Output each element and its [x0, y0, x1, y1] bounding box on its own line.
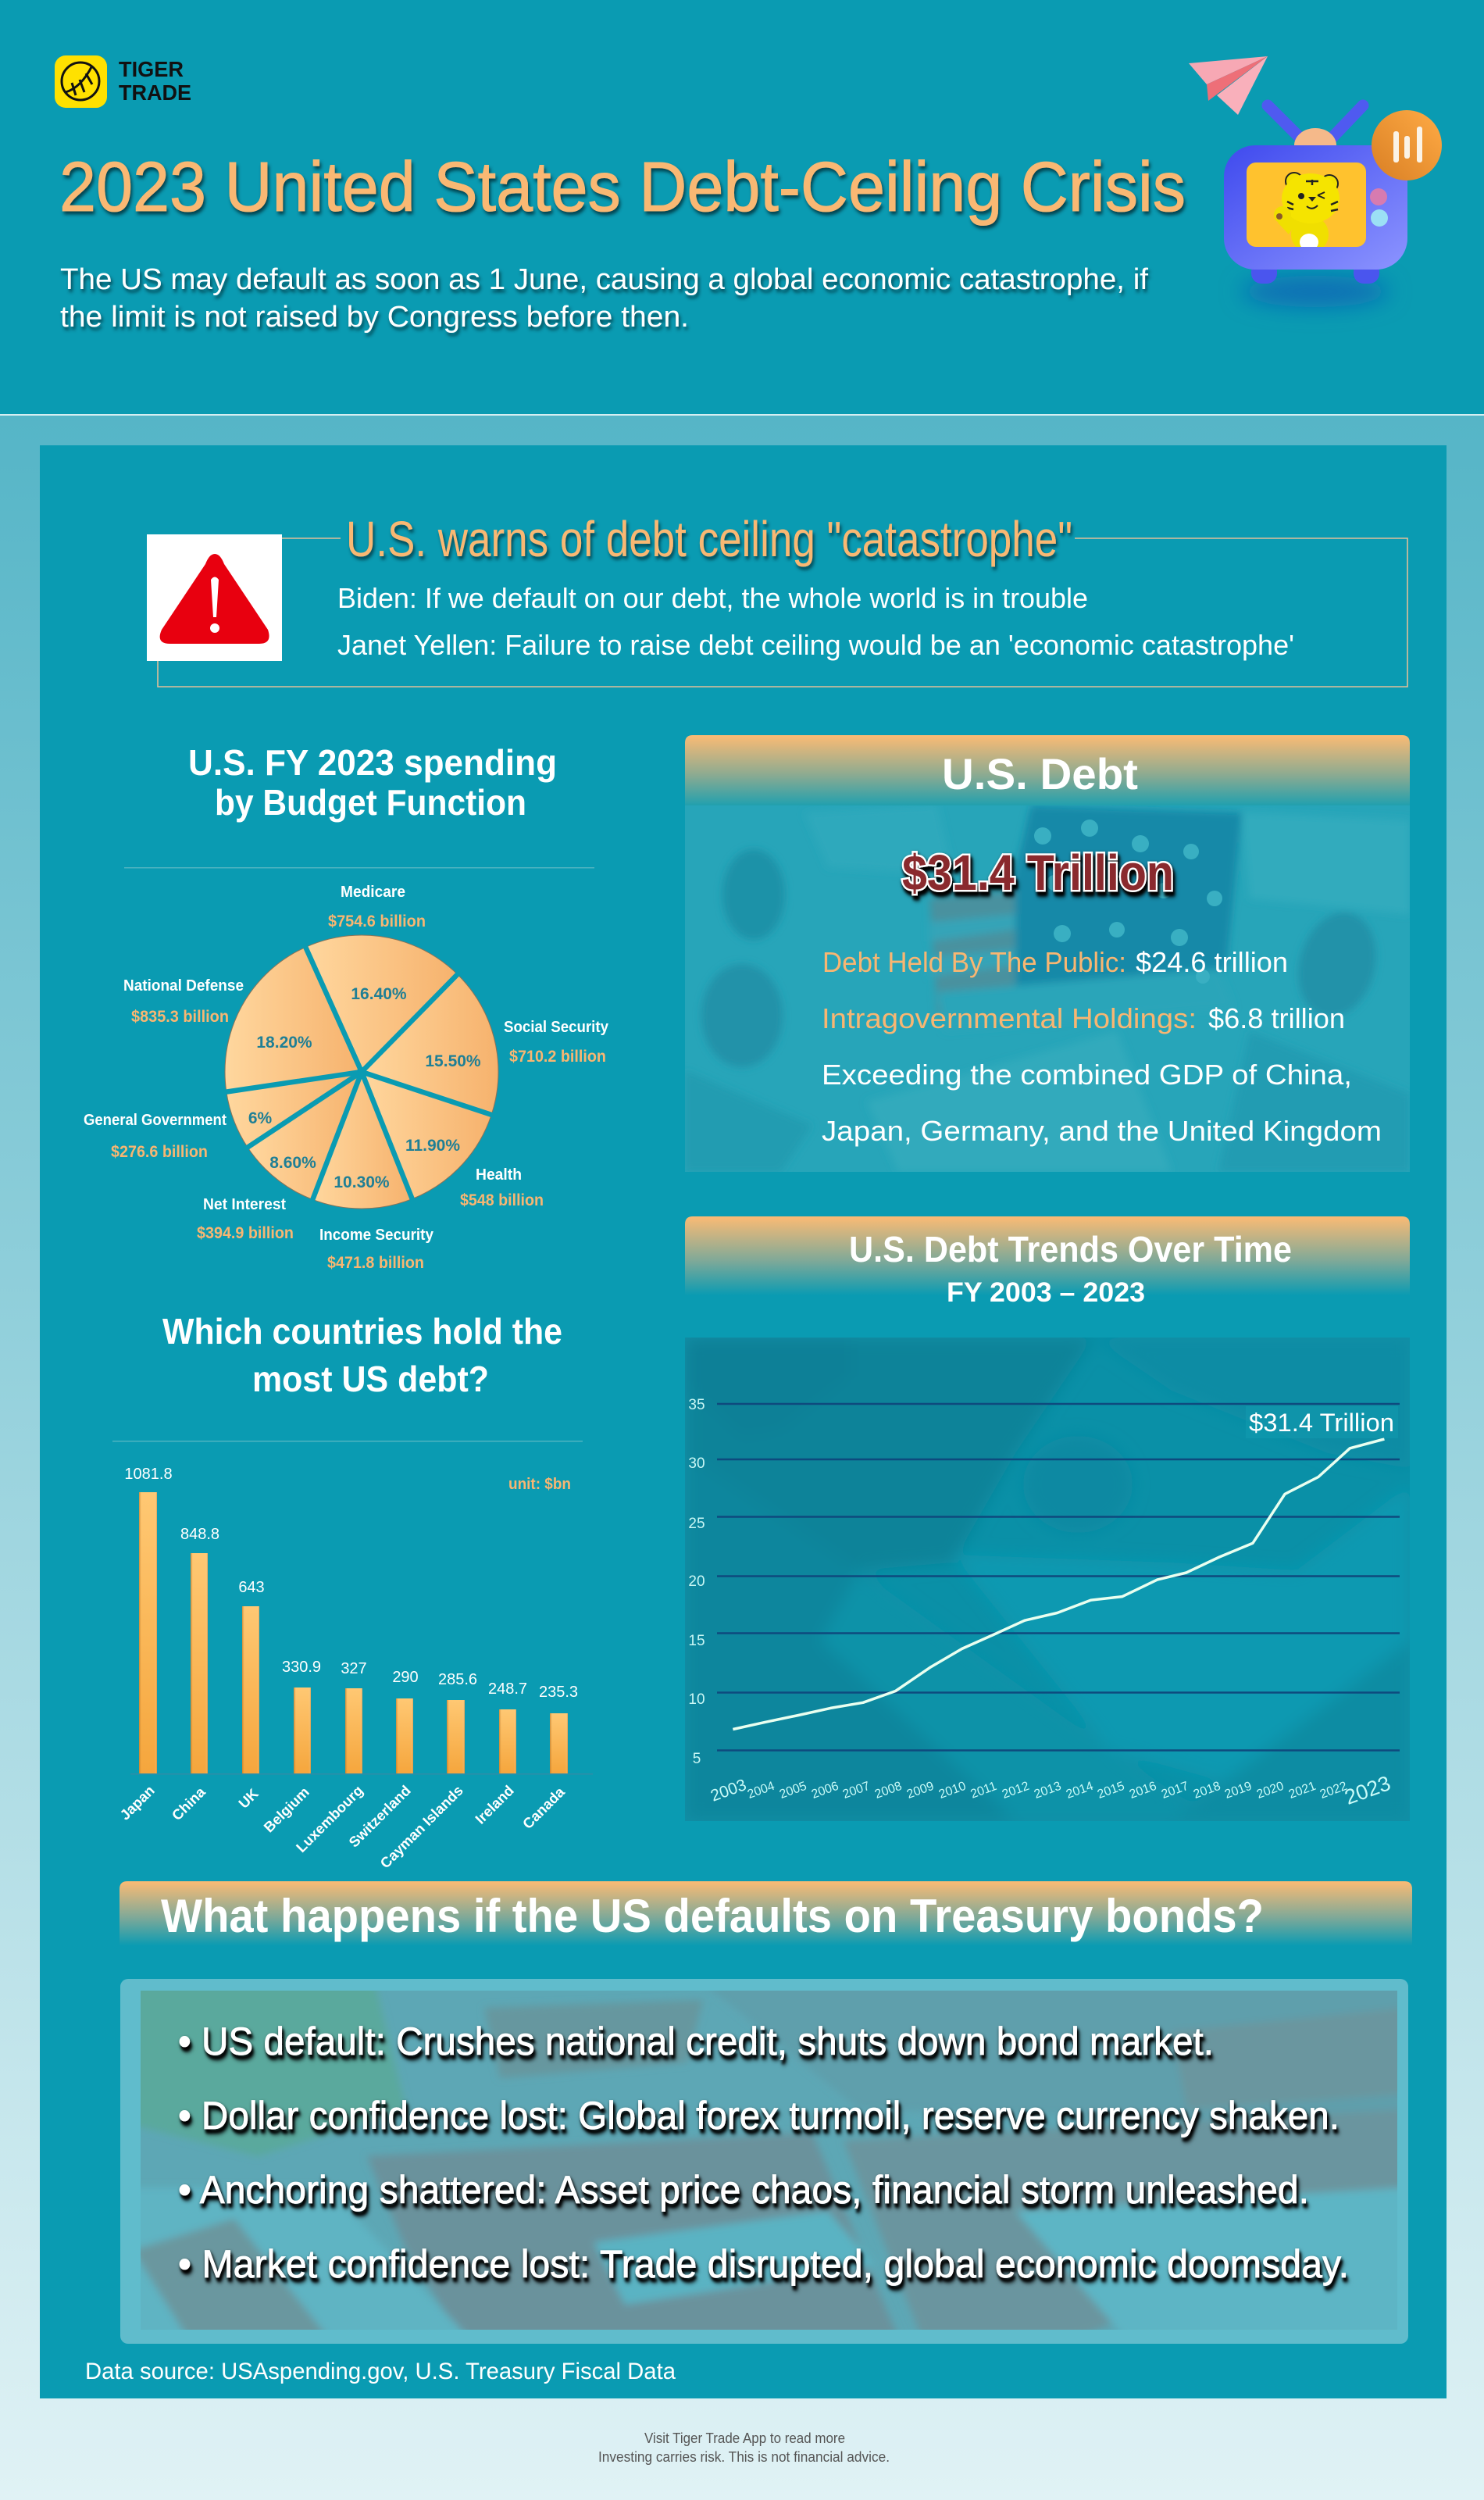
debt heading: U.S. Debt — [942, 749, 1138, 798]
callout quotes: Janet Yellen: Failure to raise debt ceiling would be an 'economic catastrophe' — [337, 629, 1294, 661]
trend heading: U.S. Debt Trends Over Time — [849, 1229, 1292, 1270]
line chart: 2014 — [1065, 1780, 1095, 1802]
pie labels: $548 billion — [460, 1191, 544, 1209]
bar chart: 1081.8 — [124, 1466, 173, 1483]
callout heading: U.S. warns of debt ceiling "catastrophe" — [346, 511, 1072, 567]
main panel — [40, 445, 1447, 2398]
footer — [598, 2430, 890, 2465]
trend heading — [849, 1229, 1292, 1308]
debt details: Japan, Germany, and the United Kingdom — [822, 1115, 1382, 1147]
line chart: $31.4 Trillion — [1249, 1409, 1394, 1437]
trend heading: FY 2003 – 2023 — [947, 1277, 1145, 1308]
pie chart: 8.60% — [269, 1154, 316, 1172]
line chart: 35 — [688, 1397, 705, 1413]
line chart: 2007 — [841, 1780, 872, 1802]
bar chart: Luxembourg — [293, 1782, 366, 1855]
line chart: 2015 — [1096, 1780, 1126, 1802]
pie labels: $276.6 billion — [111, 1143, 208, 1161]
line chart: 25 — [688, 1516, 705, 1532]
logo: Tiger Trade — [55, 55, 191, 108]
consequences heading: What happens if the US defaults on Treasury bonds? — [161, 1890, 1264, 1942]
consequences bullets — [178, 2020, 1349, 2286]
pie heading — [188, 742, 557, 823]
subtitle — [60, 263, 1148, 334]
line chart: 2010 — [937, 1780, 968, 1802]
panel: warning callout — [147, 511, 1407, 687]
line chart: 30 — [688, 1455, 705, 1472]
line chart — [688, 1397, 1400, 1809]
pie labels: Social Security — [504, 1019, 609, 1036]
debt background image — [685, 805, 1410, 1172]
debt details: Exceeding the combined GDP of China, — [822, 1059, 1352, 1091]
callout quotes: Biden: If we default on our debt, the whole world is in trouble — [337, 582, 1088, 614]
debt details: Intragovernmental Holdings: — [822, 1002, 1197, 1034]
line chart: 2009 — [905, 1780, 936, 1802]
bar chart: 235.3 — [539, 1684, 578, 1701]
consequences bullets: • Dollar confidence lost: Global forex turmoil, reserve currency shaken. — [178, 2094, 1340, 2138]
pie labels: $835.3 billion — [131, 1008, 229, 1026]
panel: debt trend — [685, 1216, 1410, 1821]
line chart: 2003 — [708, 1776, 749, 1805]
trend background image — [685, 1338, 1410, 1821]
bar chart: 327 — [341, 1660, 367, 1677]
title: 2023 United States Debt-Ceiling Crisis — [59, 148, 1186, 227]
consequences bullets: • Anchoring shattered: Asset price chaos, financial storm unleashed. — [178, 2168, 1309, 2212]
bar chart heading: most US debt? — [252, 1359, 489, 1399]
bar chart: Japan — [116, 1782, 158, 1823]
line chart: 2018 — [1192, 1780, 1222, 1802]
logo wordmark: TIGER — [119, 57, 184, 81]
subtitle: The US may default as soon as 1 June, causing a global economic catastrophe, if — [60, 263, 1148, 296]
icon: warning triangle — [147, 534, 282, 661]
bar chart: 285.6 — [438, 1671, 477, 1688]
icon: tiger television — [1224, 105, 1442, 307]
pie chart — [221, 935, 498, 1209]
bar chart: UK — [235, 1785, 262, 1812]
line chart: 2019 — [1223, 1780, 1254, 1802]
pie labels — [84, 884, 609, 1272]
pie chart: 15.50% — [425, 1052, 481, 1070]
line chart: 20 — [688, 1573, 705, 1590]
bar chart: Ireland — [472, 1782, 517, 1827]
debt details: $6.8 trillion — [1208, 1002, 1345, 1034]
line chart: 2008 — [873, 1780, 904, 1802]
icon: paper plane — [1189, 56, 1268, 115]
bar chart: 330.9 — [282, 1659, 321, 1676]
pie chart: 10.30% — [334, 1173, 390, 1191]
panel: spending pie — [84, 742, 609, 1272]
pie labels: General Government — [84, 1112, 227, 1129]
line chart: 2013 — [1033, 1780, 1063, 1802]
line chart: 2022 — [1318, 1780, 1349, 1802]
consequences header — [120, 1881, 1412, 1962]
consequences bullets: • Market confidence lost: Trade disrupted, global economic doomsday. — [178, 2242, 1349, 2286]
pie labels: National Defense — [123, 977, 244, 995]
callout quotes — [337, 582, 1294, 661]
debt details: Debt Held By The Public: — [822, 946, 1126, 978]
bar chart heading: Which countries hold the — [162, 1311, 562, 1352]
bar chart: Canada — [519, 1783, 568, 1832]
consequences bullets: • US default: Crushes national credit, shuts down bond market. — [178, 2020, 1214, 2063]
panel: holders bar chart — [112, 1311, 593, 1871]
logo wordmark: TRADE — [119, 80, 191, 105]
bar chart: Switzerland — [345, 1782, 414, 1851]
line chart: 2012 — [1001, 1780, 1031, 1802]
pie labels: $471.8 billion — [327, 1254, 424, 1272]
footer: Visit Tiger Trade App to read more — [644, 2430, 845, 2446]
pie chart: 6% — [248, 1109, 272, 1127]
line chart: 2011 — [969, 1780, 999, 1802]
footer: Investing carries risk. This is not financial advice. — [598, 2449, 890, 2465]
line chart: 2004 — [746, 1780, 776, 1802]
line chart: 15 — [688, 1633, 705, 1649]
pie chart: 18.20% — [256, 1034, 312, 1052]
line chart: 2021 — [1287, 1780, 1318, 1802]
header band — [0, 0, 1484, 416]
bar chart — [116, 1466, 593, 1871]
bar chart heading — [162, 1311, 562, 1399]
bar chart: Belgium — [260, 1784, 312, 1835]
debt header — [685, 735, 1410, 805]
line chart: 2005 — [778, 1780, 808, 1802]
line chart: 2006 — [810, 1780, 840, 1802]
pie labels: Income Security — [319, 1227, 434, 1244]
bar chart: China — [169, 1783, 209, 1823]
pie labels: $754.6 billion — [328, 912, 426, 930]
line chart: 5 — [693, 1751, 701, 1767]
logo wordmark — [119, 57, 191, 105]
pie labels: $710.2 billion — [509, 1048, 606, 1066]
line chart: 10 — [688, 1691, 705, 1708]
pie chart: 16.40% — [351, 985, 407, 1003]
panel: default consequences — [120, 1881, 1412, 2344]
pie labels: $394.9 billion — [197, 1224, 294, 1242]
bar chart: 643 — [238, 1579, 265, 1596]
pie labels: Medicare — [341, 884, 405, 901]
debt total: $31.4 Trillion — [902, 845, 1174, 901]
icon: tiger logo mark — [55, 55, 107, 108]
panel: U.S. debt — [685, 735, 1410, 1172]
line chart: 2023 — [1342, 1771, 1393, 1809]
pie chart: 11.90% — [405, 1137, 460, 1155]
pie heading: by Budget Function — [215, 782, 526, 823]
consequences frame — [120, 1979, 1408, 2344]
data source: Data source: USAspending.gov, U.S. Treasury Fiscal Data — [85, 2359, 676, 2384]
bar chart: 290 — [392, 1669, 419, 1686]
line chart: 2016 — [1128, 1780, 1158, 1802]
debt details — [822, 946, 1382, 1147]
line chart: 2020 — [1255, 1780, 1286, 1802]
pie heading: U.S. FY 2023 spending — [188, 742, 557, 783]
bar chart: 248.7 — [488, 1680, 527, 1698]
callout frame — [158, 538, 1407, 687]
trend header — [685, 1216, 1410, 1315]
bar chart: 848.8 — [180, 1526, 219, 1543]
bar chart: Cayman Islands — [376, 1782, 466, 1871]
icon: chart badge — [1372, 110, 1442, 180]
line chart: 2017 — [1160, 1780, 1190, 1802]
debt details: $24.6 trillion — [1136, 946, 1288, 978]
subtitle: the limit is not raised by Congress before then. — [60, 301, 689, 334]
unit label: unit: $bn — [508, 1476, 571, 1493]
pie labels: Net Interest — [203, 1196, 286, 1213]
consequences background image — [133, 1983, 1406, 2338]
pie labels: Health — [476, 1166, 522, 1184]
